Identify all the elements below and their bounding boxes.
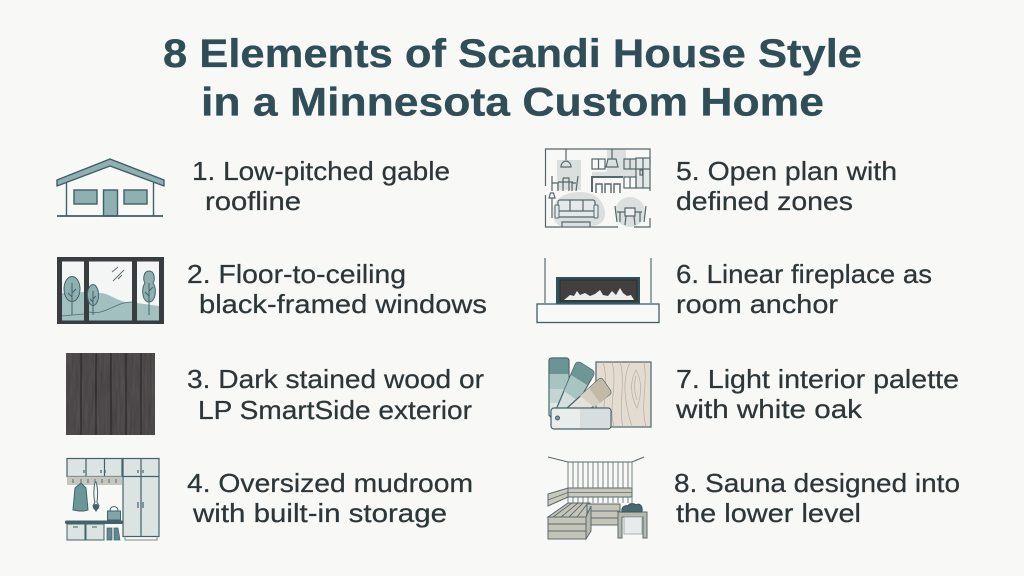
text: item 8: 8. Sauna designed into [674,468,960,498]
swatch 1 [549,358,569,420]
text: item 3 [187,364,484,425]
icon: black-framed windows [57,257,164,324]
title: 8 Elements of Scandi House Style [163,32,862,76]
text: item 1: 1. Low-pitched gable [192,156,450,186]
text: item 6: 6. Linear fireplace as [676,259,932,289]
dining set 2 [615,206,646,222]
text: item 6 [676,259,932,319]
text: item 5: 5. Open plan with [676,156,897,186]
text: item 7 [675,364,959,424]
icon: linear fireplace [537,258,659,322]
icon: palette swatches and white oak [549,358,651,429]
text: item 2: 2. Floor-to-ceiling [187,259,406,289]
icon: low-pitched gable house [57,159,164,216]
text: item 4: with built-in storage [192,498,447,528]
dining set 1 [552,176,578,191]
stools [596,184,620,193]
text: item 1: roofline [205,186,301,216]
swatch 3 [566,378,611,409]
swatch 2 [555,362,594,412]
text: item 4 [187,468,473,528]
text: item 3: LP SmartSide exterior [198,395,472,425]
text: item 3: 3. Dark stained wood or [187,364,484,394]
text: item 8: the lower level [676,498,861,528]
text: item 4: 4. Oversized mudroom [187,468,473,498]
zones [553,149,645,227]
text: item 6: room anchor [676,289,838,319]
icon: sauna [548,457,647,539]
text: item 1 [192,156,450,216]
title [163,32,862,124]
icon: dark stained wood panel [66,353,155,435]
title: in a Minnesota Custom Home [201,80,824,124]
lamp and sofa [549,193,555,218]
text: item 5: defined zones [676,186,853,216]
text: item 7: 7. Light interior palette [676,364,959,394]
pendants [561,149,618,167]
text: item 7: with white oak [675,394,863,424]
kitchen cabinets [592,159,605,169]
icon: mudroom storage [65,458,159,540]
text: item 2: black-framed windows [199,289,487,319]
text: item 2 [187,259,487,319]
icon: open plan with zones [546,149,650,227]
text: item 5 [676,156,897,216]
text: item 8 [674,468,960,528]
